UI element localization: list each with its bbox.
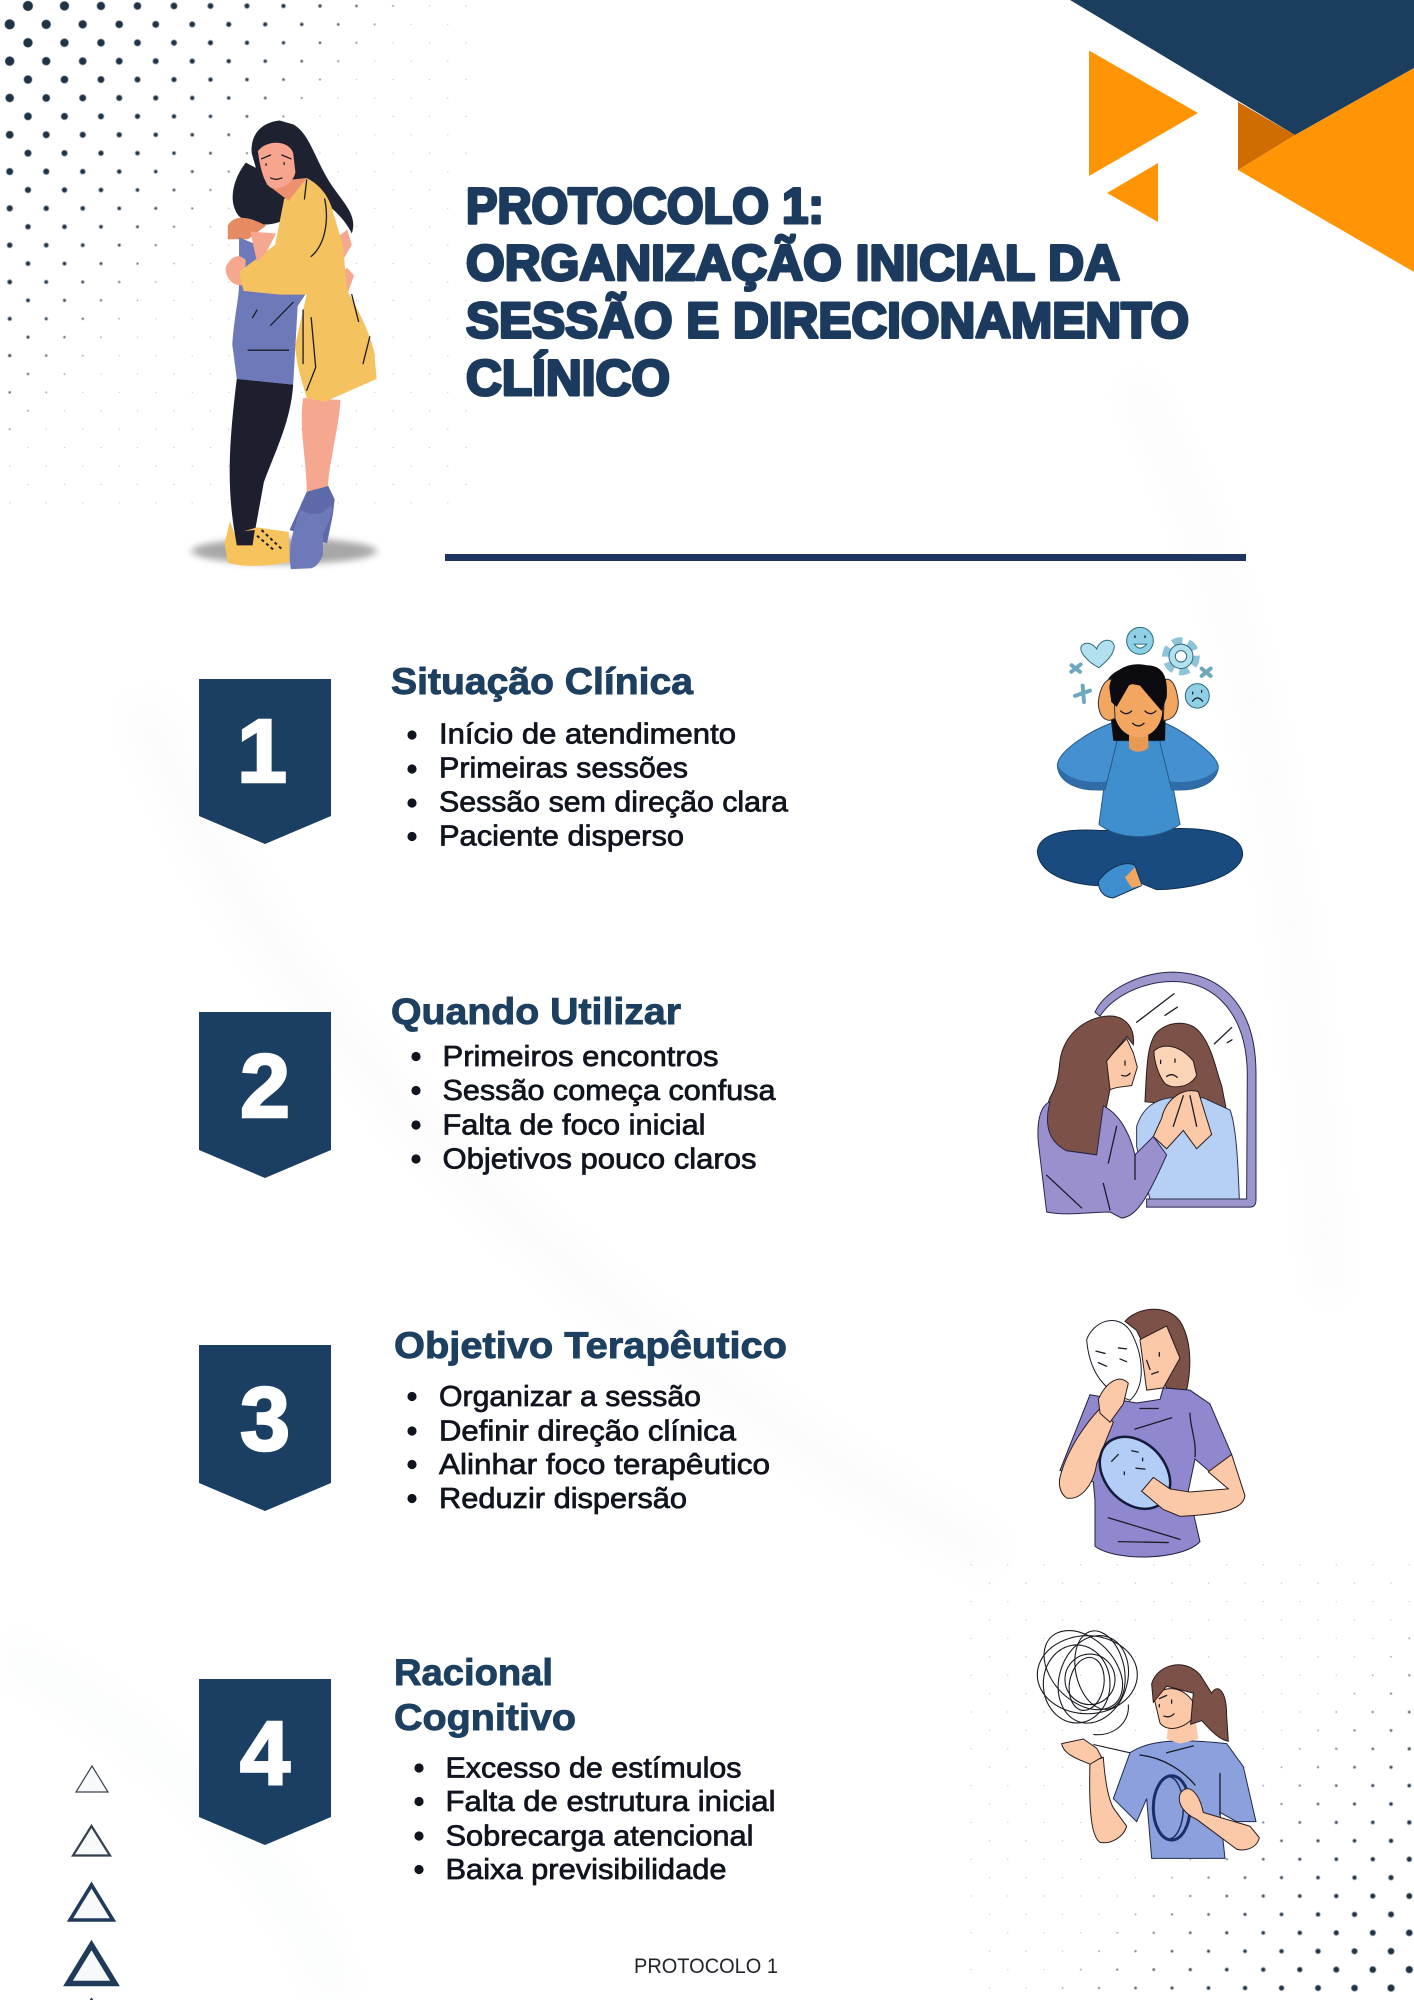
section 3: objetivo terapêutico <box>199 1325 787 1515</box>
bullet list 1 <box>407 718 789 852</box>
bullet list 3 <box>407 1381 770 1515</box>
bullet list 2: Primeiros encontros <box>442 1041 718 1073</box>
illustration: woman facing mirror <box>1038 972 1256 1218</box>
bullet list 4: Baixa previsibilidade <box>446 1854 726 1886</box>
bullet list 3: Organizar a sessão <box>439 1381 701 1413</box>
bullet list 4: Sobrecarga atencional <box>446 1820 754 1852</box>
heading 4: Cognitivo <box>394 1697 576 1738</box>
illustration: two women hugging <box>192 121 377 569</box>
bullet list 4: Falta de estrutura inicial <box>446 1786 776 1818</box>
bullet list 2: Sessão começa confusa <box>442 1075 776 1107</box>
icon: sad face <box>1185 684 1209 708</box>
title: PROTOCOLO 1: <box>466 178 824 234</box>
bullet list 3: Definir direção clínica <box>439 1416 737 1448</box>
number badge 3: 3 <box>240 1370 290 1470</box>
title <box>466 178 1189 406</box>
icon: crosses <box>1071 664 1211 702</box>
title: ORGANIZAÇÃO INICIAL DA <box>466 235 1120 291</box>
section 2: quando utilizar <box>199 991 776 1178</box>
illustration: woman untangling thread <box>1035 1615 1259 1858</box>
number badge 4: 4 <box>240 1704 290 1804</box>
icon: tangled scribble <box>1035 1615 1140 1755</box>
number badge 4 <box>199 1679 331 1845</box>
bullet list 3: Reduzir dispersão <box>439 1483 687 1515</box>
bullet list 4: Excesso de estímulos <box>446 1752 742 1784</box>
icon: smiley <box>1127 627 1153 654</box>
heading 2: Quando Utilizar <box>391 991 681 1032</box>
bullet list 2: Objetivos pouco claros <box>442 1144 756 1176</box>
number badge 1 <box>199 679 331 844</box>
bullet list 1: Primeiras sessões <box>439 752 688 784</box>
number badge 1: 1 <box>237 702 287 802</box>
bullet list 2: Falta de foco inicial <box>442 1110 706 1142</box>
section 4: racional cognitivo <box>199 1652 776 1886</box>
number badge 2 <box>199 1012 331 1178</box>
heading 3: Objetivo Terapêutico <box>394 1325 787 1366</box>
bullet list 2 <box>411 1041 776 1176</box>
corner decoration: top right triangles <box>1070 0 1414 272</box>
dot pattern: bottom right <box>960 1560 1414 2000</box>
heading 4 <box>394 1652 576 1738</box>
section 1: situação clínica <box>199 661 789 852</box>
number badge 2: 2 <box>240 1037 290 1137</box>
title underline <box>445 554 1246 561</box>
bullet list 3: Alinhar foco terapêutico <box>439 1449 770 1481</box>
icon: heart <box>1081 640 1114 668</box>
number badge 3 <box>199 1345 331 1511</box>
title: CLÍNICO <box>466 350 670 406</box>
decorative triangles: bottom left <box>65 1766 118 2000</box>
dot pattern: top left <box>0 0 480 520</box>
heading 4: Racional <box>394 1652 553 1693</box>
illustration: woman holding masks <box>1059 1309 1245 1557</box>
bullet list 4 <box>414 1752 776 1886</box>
icon: gear <box>1166 641 1196 672</box>
footer label: PROTOCOLO 1 <box>634 1955 778 1978</box>
bullet list 1: Início de atendimento <box>439 718 736 750</box>
heading 1: Situação Clínica <box>391 661 693 702</box>
bullet list 1: Sessão sem direção clara <box>439 786 789 818</box>
illustration: meditating person with emotion icons <box>1037 627 1243 898</box>
bullet list 1: Paciente disperso <box>439 820 684 852</box>
title: SESSÃO E DIRECIONAMENTO <box>466 292 1189 348</box>
